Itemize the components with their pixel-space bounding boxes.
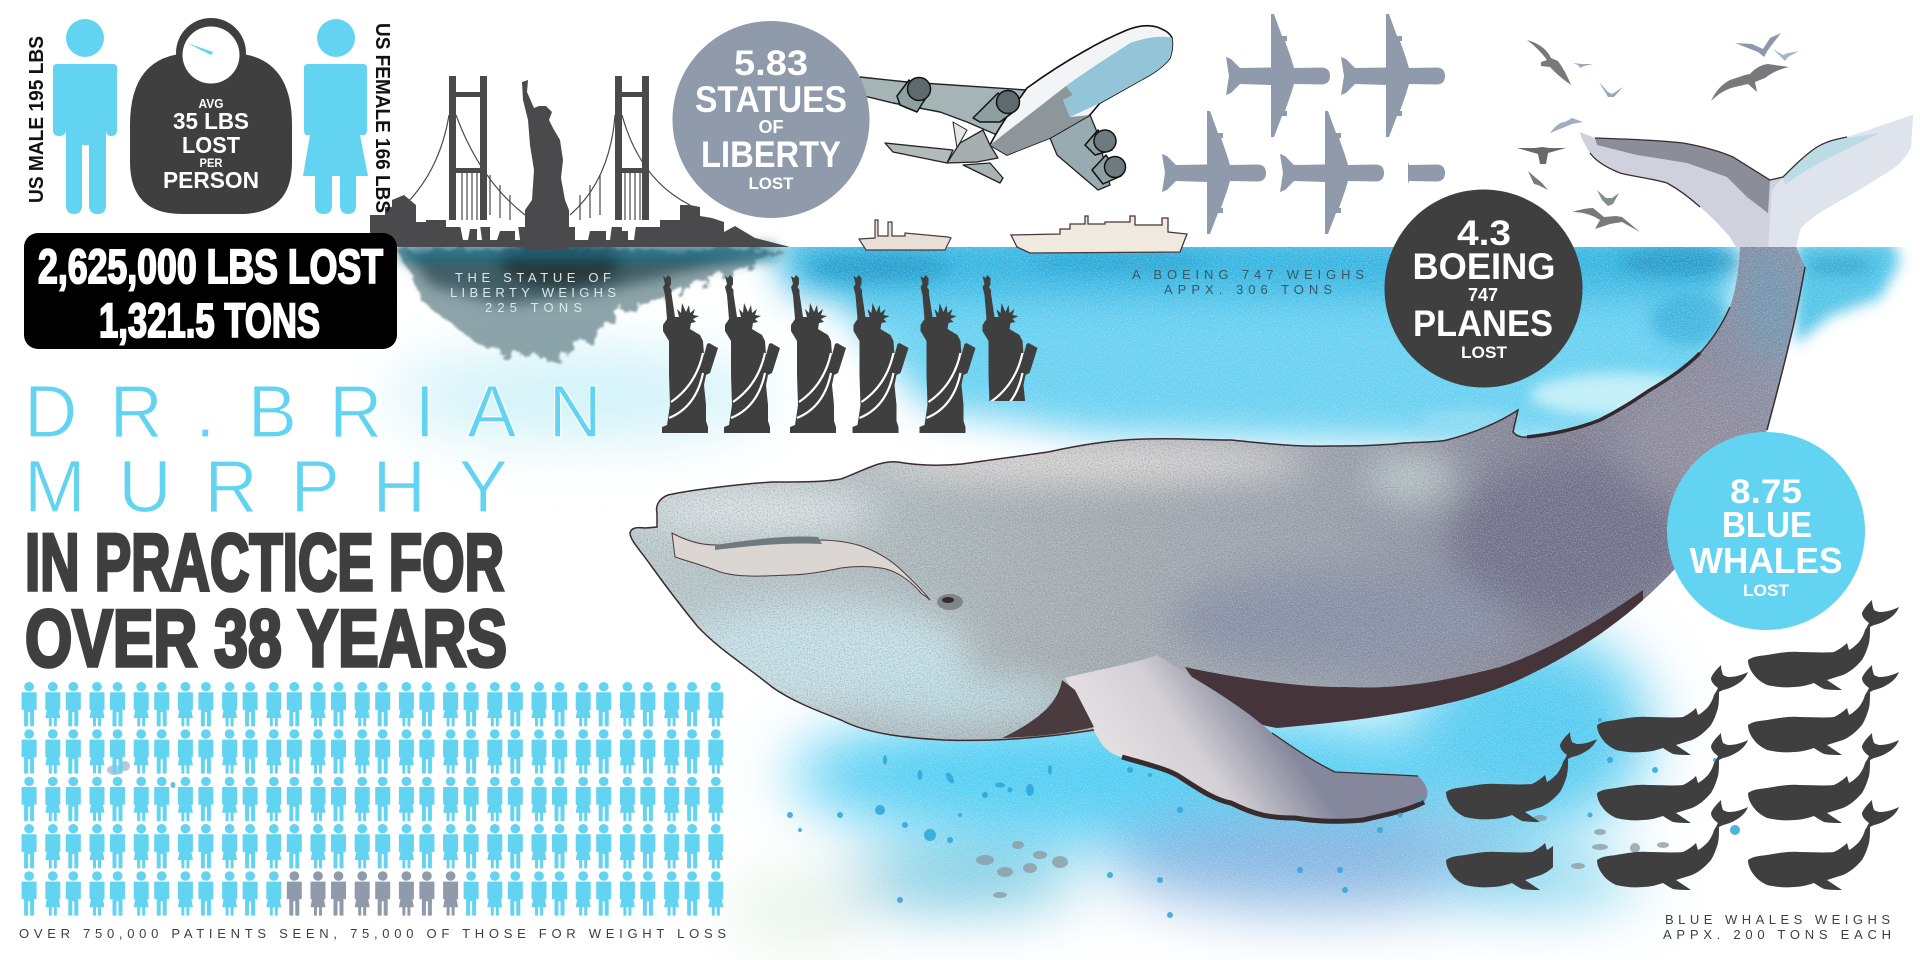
whale body: [630, 247, 1805, 740]
circle: blue whales lost: BLUE: [1722, 504, 1812, 545]
ink skyline and statue of liberty scene: [370, 76, 790, 360]
icon: small ship: [859, 220, 951, 250]
bird 8: [1517, 147, 1566, 164]
scale text: PER: [200, 158, 223, 170]
circle: statues of liberty lost: LIBERTY: [701, 134, 841, 175]
caption: statue of liberty weight: 225 TONS: [485, 300, 582, 315]
caption: statue of liberty weight: THE STATUE OF: [455, 270, 611, 285]
boeing plane pictograms: [1162, 14, 1445, 234]
circle: blue whales lost: LOST: [1743, 581, 1790, 600]
bird 7: [1550, 118, 1583, 133]
whale tail fluke: [1580, 115, 1913, 247]
jet right wing: [1050, 115, 1110, 190]
whale eye: [937, 594, 963, 610]
circle: boeing planes lost: 4.3: [1457, 214, 1511, 253]
jet fuselage: [990, 26, 1172, 155]
icon: US female figure: [303, 19, 368, 214]
caption: statue of liberty weight: LIBERTY WEIGHS: [450, 285, 616, 300]
sketched jet airplane: [860, 26, 1172, 190]
heading: years in practice: IN PRACTICE FOR: [25, 518, 504, 608]
scale text: AVG: [198, 97, 224, 111]
bird 11: [1572, 208, 1640, 232]
bird 1: [1527, 40, 1571, 85]
bird 5: [1773, 49, 1799, 61]
jet left wing: [860, 77, 1057, 135]
grey paint blotches: [107, 761, 1669, 898]
people pictogram grid: [22, 682, 723, 916]
icon: bathroom scale: [130, 18, 292, 214]
blue whale illustration: [630, 115, 1913, 821]
paint splatter: [787, 718, 1740, 918]
scale text: PERSON: [163, 167, 259, 193]
circle: statues of liberty lost: OF: [758, 117, 784, 137]
jet left stabilizer: [885, 143, 953, 163]
caption: statue of liberty weight: [450, 270, 616, 315]
callout: total pounds lost: 1,321.5 TONS: [99, 295, 320, 348]
whale baleen mouth: [672, 533, 930, 600]
whale shading: [630, 240, 1810, 740]
caption: blue whale weight: BLUE WHALES WEIGHS: [1665, 912, 1890, 927]
title: doctor name: DR.BRIAN: [24, 370, 602, 453]
caption: blue whale weight: [1663, 912, 1891, 942]
caption: boeing weight: APPX. 306 TONS: [1164, 282, 1332, 297]
caption: patients seen: OVER 750,000 PATIENTS SEEN, 75,000 OF THOSE FOR WEIGHT LOSS: [19, 926, 726, 941]
bird 9: [1528, 171, 1548, 190]
bird 4: [1735, 33, 1781, 57]
statue of liberty pictograms: [662, 275, 1038, 433]
whale outline: [630, 267, 1805, 740]
caption: boeing weight: [1132, 267, 1364, 297]
callout: total pounds lost: [24, 233, 397, 349]
icon: US male figure: [53, 19, 117, 214]
scale text: [163, 97, 259, 193]
circle: blue whales lost: [1667, 432, 1865, 630]
whale flipper: [1002, 655, 1427, 821]
title: doctor name: [24, 370, 602, 528]
bird 6: [1711, 64, 1789, 101]
icon: large ship: [1011, 216, 1187, 253]
jet lower stabilizer: [963, 163, 1003, 183]
jet grey belly: [990, 86, 1090, 155]
whale belly hatching: [1185, 590, 1643, 728]
circle: statues of liberty lost: [672, 21, 870, 218]
caption: blue whale weight: APPX. 200 TONS EACH: [1663, 927, 1891, 942]
circle: blue whales lost: WHALES: [1690, 540, 1842, 581]
jet engines: [897, 78, 1126, 184]
caption: boeing weight: A BOEING 747 WEIGHS: [1132, 267, 1364, 282]
title: doctor name: MURPHY: [24, 445, 508, 528]
heading: years in practice: OVER 38 YEARS: [25, 594, 507, 684]
circle: boeing planes lost: LOST: [1461, 343, 1508, 362]
bird 3: [1599, 82, 1623, 97]
bird 2: [1573, 63, 1593, 68]
circle: boeing planes lost: BOEING: [1412, 246, 1556, 287]
jet rear body: [947, 130, 998, 163]
bird 10: [1597, 190, 1619, 206]
ships on horizon: [859, 216, 1187, 253]
watercolor sea: [390, 230, 1910, 960]
label: US female weight: US FEMALE 166 LBS: [371, 23, 394, 213]
birds: [1517, 33, 1799, 232]
jet blue nose panel: [1063, 37, 1172, 117]
circle: blue whales lost: 8.75: [1730, 473, 1802, 511]
circle: boeing planes lost: 747: [1468, 285, 1498, 305]
circle: statues of liberty lost: 5.83: [734, 44, 808, 83]
circle: statues of liberty lost: STATUES: [695, 79, 847, 120]
whale tail hatch line: [1527, 353, 1700, 437]
circle: statues of liberty lost: LOST: [748, 174, 794, 193]
jet vertical fin: [953, 122, 967, 148]
label: US male weight: US MALE 195 LBS: [25, 36, 48, 203]
callout: total pounds lost: 2,625,000 LBS LOST: [38, 241, 383, 294]
blue whale pictograms: [1446, 600, 1899, 890]
scale text: LOST: [182, 132, 240, 158]
circle: boeing planes lost: [1384, 190, 1582, 388]
scale text: 35 LBS: [173, 108, 249, 134]
circle: boeing planes lost: PLANES: [1413, 303, 1553, 344]
heading: years in practice: [25, 518, 507, 684]
